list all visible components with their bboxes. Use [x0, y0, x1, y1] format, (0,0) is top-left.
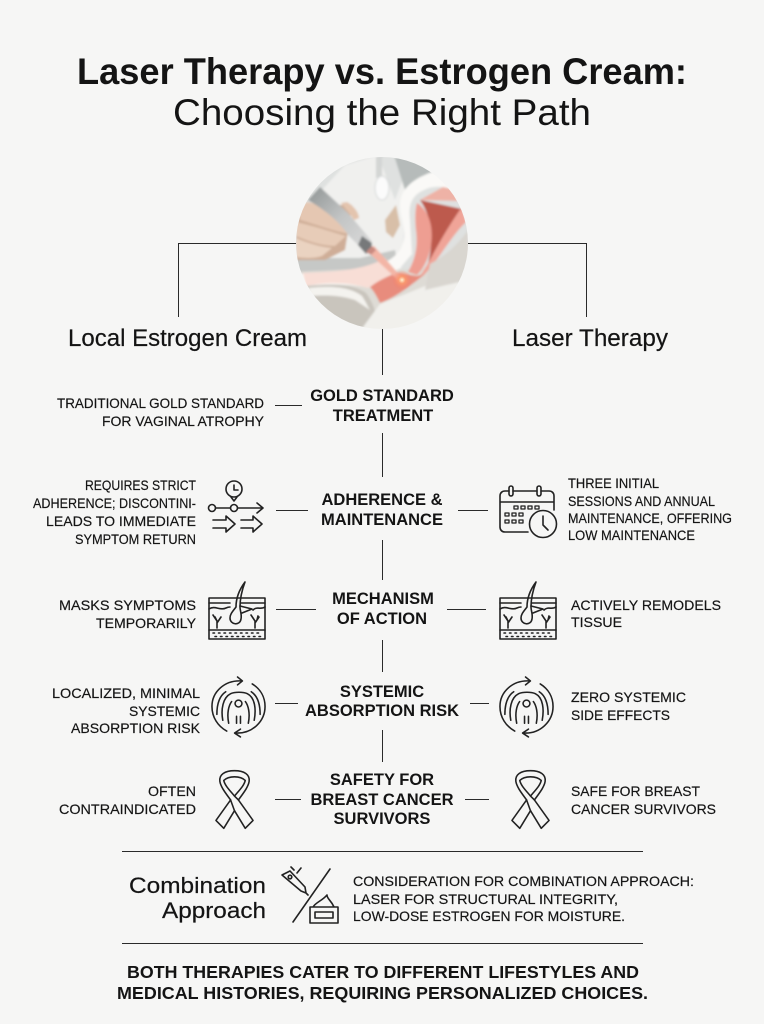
- center label: absorption: ABSORPTION RISK: [305, 702, 459, 720]
- center label: mechanism: [332, 590, 434, 628]
- combination heading: [129, 873, 266, 923]
- combination approach panel: [129, 867, 694, 924]
- title: Laser Therapy vs. Estrogen Cream:: [77, 51, 687, 92]
- icon: skin layers left: [209, 582, 265, 639]
- right text: safety: [571, 783, 716, 817]
- right text: mechanism: TISSUE: [571, 614, 622, 630]
- icon: body cycle left: [212, 677, 265, 737]
- center label: adherence: [321, 491, 443, 529]
- right text: maintenance: THREE INITIAL: [568, 475, 659, 491]
- left text: adherence: SYMPTOM RETURN: [75, 531, 196, 547]
- right text: safety: CANCER SURVIVORS: [571, 801, 716, 817]
- central illustration: laser treatment: [296, 157, 468, 329]
- right text: maintenance: LOW MAINTENANCE: [568, 527, 695, 543]
- right text: absorption: [571, 689, 686, 723]
- closing statement: MEDICAL HISTORIES, REQUIRING PERSONALIZED CHOICES.: [117, 983, 648, 1003]
- row: mechanism of action: [59, 582, 721, 639]
- icon: clock and arrows: [208, 481, 263, 532]
- left text: gold standard: FOR VAGINAL ATROPHY: [102, 413, 265, 429]
- center label: safety: [310, 771, 454, 828]
- combination heading: Approach: [162, 898, 266, 923]
- row: adherence and maintenance: [33, 475, 732, 547]
- right text: safety: SAFE FOR BREAST: [571, 783, 700, 799]
- right text: absorption: ZERO SYSTEMIC: [571, 689, 686, 705]
- center label: gold standard: TREATMENT: [333, 407, 433, 425]
- left text: mechanism: TEMPORARILY: [96, 615, 197, 631]
- left text: adherence: LEADS TO IMMEDIATE: [46, 513, 196, 529]
- combination description: CONSIDERATION FOR COMBINATION APPROACH:: [353, 873, 694, 889]
- icon: body cycle right: [500, 677, 553, 737]
- left text: adherence: REQUIRES STRICT: [85, 477, 196, 493]
- icon: ribbon left: [216, 771, 253, 828]
- icon: laser and cream jar: [282, 867, 338, 923]
- icon: ribbon right: [512, 771, 549, 828]
- left text: mechanism: MASKS SYMPTOMS: [59, 597, 196, 613]
- left text: mechanism: [59, 597, 197, 631]
- right text: maintenance: SESSIONS AND ANNUAL: [568, 493, 715, 509]
- center label: safety: SURVIVORS: [334, 810, 430, 828]
- left text: gold standard: TRADITIONAL GOLD STANDARD: [57, 395, 264, 411]
- center label: absorption: SYSTEMIC: [340, 683, 424, 701]
- left text: safety: [59, 783, 196, 817]
- closing statement: BOTH THERAPIES CATER TO DIFFERENT LIFESTYLES AND: [127, 962, 639, 982]
- left text: absorption: SYSTEMIC: [129, 703, 200, 719]
- left text: absorption: ABSORPTION RISK: [71, 720, 201, 736]
- row: systemic absorption risk: [52, 677, 686, 737]
- center label: adherence: MAINTENANCE: [321, 511, 443, 529]
- row: gold standard treatment: [57, 387, 454, 429]
- connector lines: [178, 244, 586, 800]
- center label: safety: BREAST CANCER: [310, 791, 454, 809]
- right text: mechanism: ACTIVELY REMODELS: [571, 597, 721, 613]
- center label: mechanism: MECHANISM: [332, 590, 434, 608]
- center label: gold standard: GOLD STANDARD: [310, 387, 454, 405]
- right text: maintenance: MAINTENANCE, OFFERING: [568, 510, 732, 526]
- combination description: [353, 873, 694, 924]
- combination description: LOW-DOSE ESTROGEN FOR MOISTURE.: [353, 908, 625, 924]
- column heading: local estrogen cream: Local Estrogen Cream: [68, 325, 307, 352]
- title: Choosing the Right Path: [173, 92, 591, 133]
- combination heading: Combination: [129, 873, 266, 898]
- title: [77, 51, 687, 133]
- closing statement: [117, 962, 648, 1003]
- left text: absorption: LOCALIZED, MINIMAL: [52, 685, 200, 701]
- left text: gold standard: [57, 395, 265, 429]
- left text: adherence: ADHERENCE; DISCONTINI-: [33, 495, 196, 511]
- right text: absorption: SIDE EFFECTS: [571, 707, 670, 723]
- icon: skin layers right: [500, 582, 556, 639]
- right text: maintenance: [568, 475, 732, 543]
- left text: adherence: [33, 477, 196, 547]
- center label: adherence: ADHERENCE &: [321, 491, 443, 509]
- center label: mechanism: OF ACTION: [337, 610, 427, 628]
- right text: mechanism: [571, 597, 721, 630]
- icon: calendar with clock: [500, 486, 556, 538]
- column heading: laser therapy: Laser Therapy: [512, 325, 668, 352]
- row: safety for breast cancer survivors: [59, 771, 716, 828]
- dividers: [122, 852, 643, 944]
- center label: absorption: [305, 683, 459, 720]
- center label: safety: SAFETY FOR: [330, 771, 434, 789]
- combination description: LASER FOR STRUCTURAL INTEGRITY,: [353, 891, 618, 907]
- center label: gold standard: [310, 387, 454, 425]
- left text: safety: OFTEN: [148, 783, 196, 799]
- left text: absorption: [52, 685, 201, 736]
- left text: safety: CONTRAINDICATED: [59, 801, 196, 817]
